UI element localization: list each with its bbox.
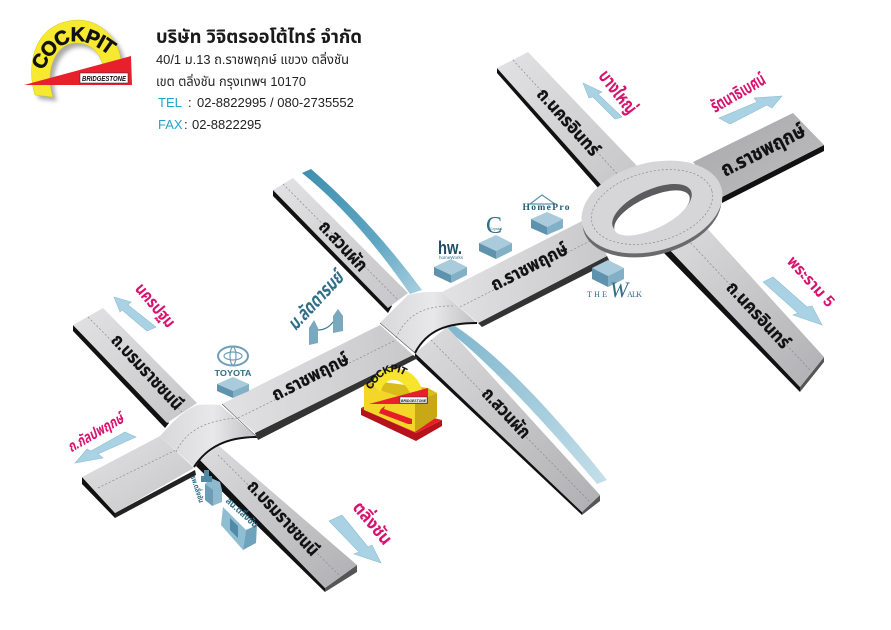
landmark: Ladda Rom village: ม.ลัดดารมย์ xyxy=(284,265,350,335)
landmark: Ladda Rom village xyxy=(284,265,350,345)
address block xyxy=(156,51,349,89)
landmark: HomePro xyxy=(522,195,570,235)
landmark: Crystal xyxy=(479,213,512,259)
arrow: Rama 5 xyxy=(763,277,822,325)
road: Ratchaphruek east: ถ.ราชพฤกษ์ xyxy=(717,120,809,181)
road: Boromratchachonnani south xyxy=(196,445,357,592)
logo: Cockpit Bridgestone: COCKPIT xyxy=(32,27,118,68)
river: south section xyxy=(445,326,607,484)
telephone: TEL xyxy=(158,95,182,110)
landmark: Cockpit shop building xyxy=(361,364,442,441)
logo: Cockpit Bridgestone xyxy=(24,20,132,103)
company title: บริษัท วิจิตรออโต้ไทร์ จำกัด xyxy=(156,26,362,48)
fax: 02-8822295 xyxy=(192,117,261,132)
road: Nakhon In north: ถ.นครอินทร์ xyxy=(533,84,604,160)
label: Bang Yai: บางใหญ่ xyxy=(594,66,642,119)
arrow: Kanlapaphruek xyxy=(75,432,136,463)
arrow: Nakhon Pathom xyxy=(114,297,156,331)
road: Boromratchachonnani south: ถ.บรมราชชนนี xyxy=(243,476,323,560)
road: Nakhon In north xyxy=(497,52,638,190)
landmark: HomeWorks: hw. xyxy=(438,238,462,258)
road: Ratchaphruek centre xyxy=(442,217,610,327)
road: Ratchaphruek west xyxy=(222,325,418,440)
landmark: Cockpit shop building: BRIDGESTONE xyxy=(401,398,426,403)
bridge: Boromratchachonnani flyover xyxy=(160,404,257,467)
label: Rattanathibet: รัตนาธิเบศน์ xyxy=(707,69,769,116)
road: Ratchaphruek west: ถ.ราชพฤกษ์ xyxy=(268,349,352,405)
river: north section xyxy=(302,169,422,294)
road: Suan Phak south xyxy=(415,327,600,515)
road: Ratchaphruek far west xyxy=(82,436,196,518)
landmark: Crystal: C xyxy=(486,213,502,239)
fax: FAX xyxy=(158,117,183,132)
landmark: Toyota: TOYOTA xyxy=(214,368,252,378)
road: Ratchaphruek centre: ถ.ราชพฤกษ์ xyxy=(487,239,571,295)
road: Suan Phak north: ถ.สวนผัก xyxy=(315,216,372,275)
address block: เขต ตลิ่งชัน กรุงเทพฯ 10170 xyxy=(156,73,306,89)
landmark: The Walk: THE xyxy=(587,290,607,299)
address block: 40/1 ม.13 ถ.ราชพฤกษ์ แขวง ตลิ่งชัน xyxy=(156,51,349,67)
road: Boromratchachonnani north: ถ.บรมราชชนนี xyxy=(107,330,187,414)
label: Rama 5: พระราม 5 xyxy=(783,253,837,311)
telephone: : xyxy=(188,95,192,110)
bridge: Suan Phak flyover xyxy=(380,292,477,353)
landmark: Cockpit shop building: COCKPIT xyxy=(366,364,408,388)
landmark: The Walk: ALK xyxy=(627,290,642,299)
road: Nakhon In south: ถ.นครอินทร์ xyxy=(722,277,794,353)
road: Boromratchachonnani north xyxy=(73,308,197,428)
logo: Cockpit Bridgestone: BRIDGESTONE xyxy=(82,74,126,83)
roundabout xyxy=(571,146,733,272)
landmark: The Walk xyxy=(587,260,642,302)
label: Kanlapaphruek: ถ.กัลปพฤกษ์ xyxy=(65,409,129,456)
landmark: Crystal: Crystal xyxy=(490,226,502,231)
landmark: Taling Chan police station xyxy=(221,495,261,550)
landmark: Toyota xyxy=(214,346,252,398)
landmark: HomePro: HomePro xyxy=(522,203,570,213)
road: Nakhon In south xyxy=(664,226,824,392)
road: Ratchaphruek east xyxy=(693,113,824,203)
landmark: HomeWorks xyxy=(434,238,467,283)
landmark: The Walk: W xyxy=(610,277,630,302)
label: Nakhon Pathom: นครปฐม xyxy=(131,279,179,331)
landmark: Taling Chan hospital: รพ.ตลิ่งชัน xyxy=(189,474,207,504)
landmark: Taling Chan police station: สน.ตลิ่งชัน xyxy=(223,495,261,531)
landmark: Taling Chan hospital xyxy=(189,470,222,506)
telephone: 02-8822995 / 080-2735552 xyxy=(197,95,354,110)
label: Taling Chan: ตลิ่งชัน xyxy=(349,496,398,549)
road: Suan Phak south: ถ.สวนผัก xyxy=(478,383,535,442)
landmark: HomeWorks: homeWorks xyxy=(439,255,464,260)
arrow: Rattanathibet xyxy=(719,96,782,124)
arrow: Bang Yai xyxy=(583,83,622,119)
road: Suan Phak north xyxy=(273,178,408,313)
arrow: Taling Chan xyxy=(329,515,381,563)
fax: : xyxy=(184,117,188,132)
